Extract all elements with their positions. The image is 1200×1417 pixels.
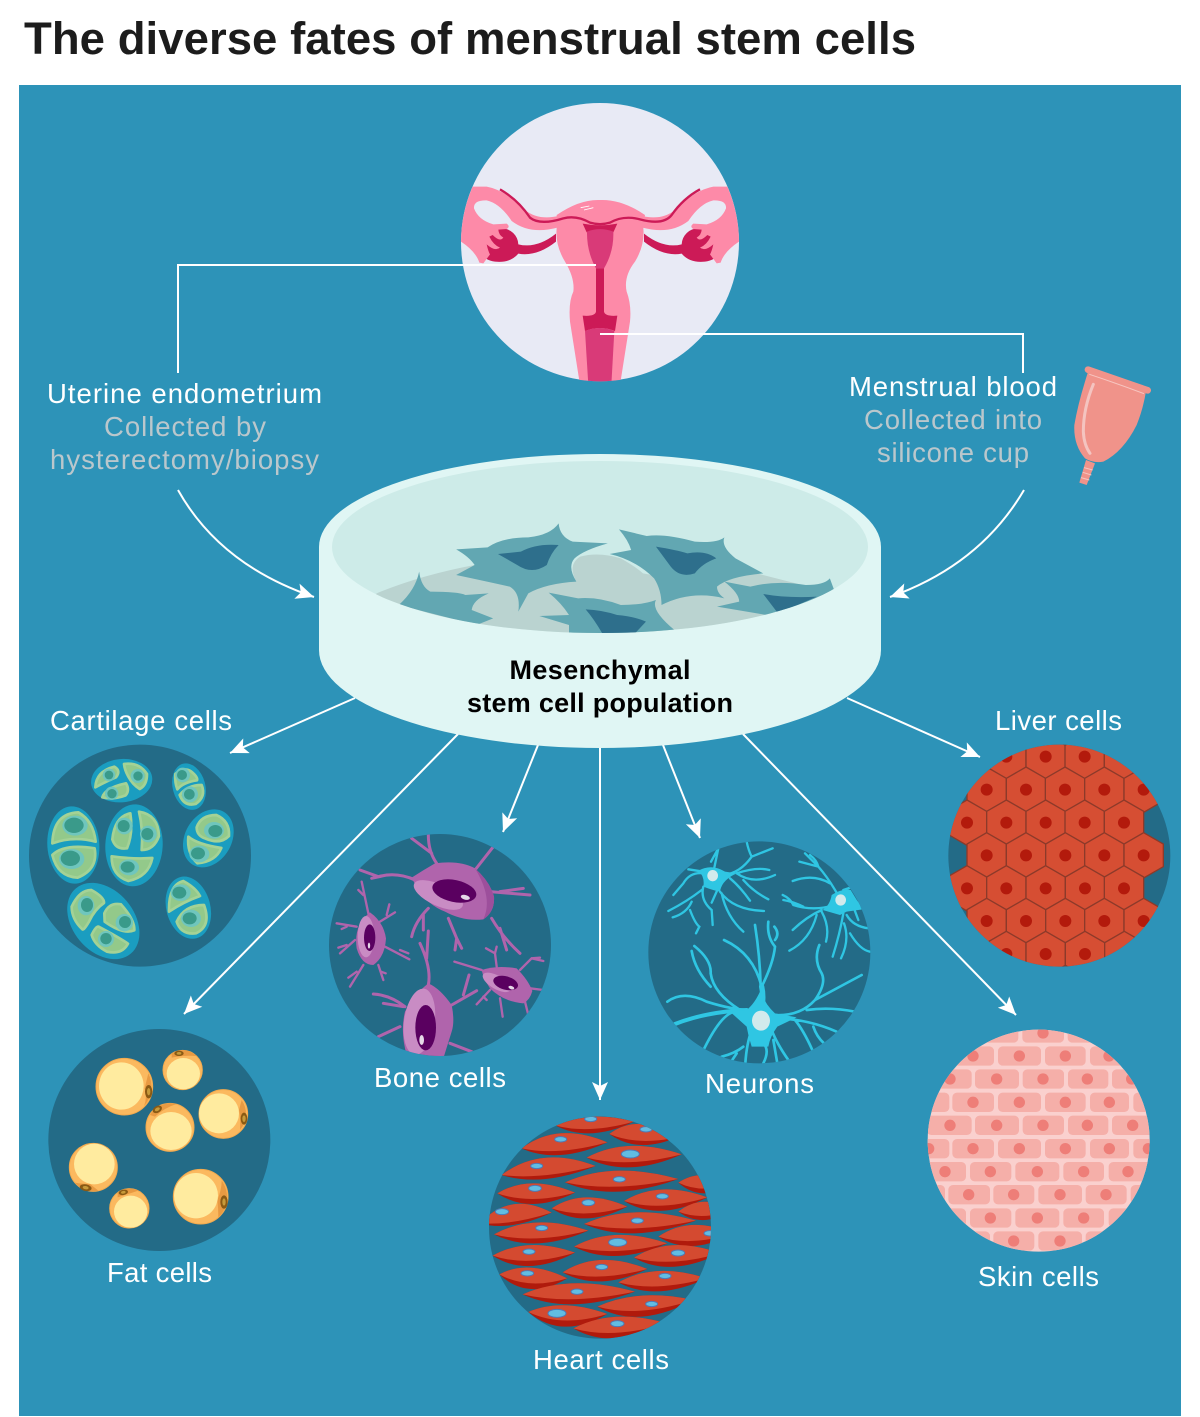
text: menstrual blood <box>849 371 1057 468</box>
illustration: bone cells <box>329 834 551 1058</box>
text: dish label <box>467 655 733 718</box>
text: menstrual blood: Collected into <box>864 404 1042 435</box>
arrow: menstrual blood to dish <box>890 490 1024 597</box>
text: uterine endometrium: Collected by <box>104 411 266 442</box>
icon: menstrual cup <box>1074 370 1148 485</box>
connector: menstrual blood line <box>600 334 1023 373</box>
illustration: petri dish <box>319 454 881 748</box>
arrow: to neurons <box>663 745 700 838</box>
label: skin cells: Skin cells <box>978 1261 1099 1292</box>
text: uterine endometrium <box>47 378 322 475</box>
label: cartilage cells: Cartilage cells <box>50 705 232 736</box>
illustration: neurons <box>648 841 870 1063</box>
text: menstrual blood: silicone cup <box>877 437 1029 468</box>
label: bone cells: Bone cells <box>374 1062 506 1093</box>
arrow: to liver cells <box>847 698 980 757</box>
illustration: liver cells <box>947 734 1170 977</box>
illustration: heart cells <box>489 1116 711 1339</box>
arrow: to skin cells <box>743 734 1016 1015</box>
label: heart cells: Heart cells <box>533 1344 669 1375</box>
arrow: endometrium to dish <box>178 490 314 597</box>
label: fat cells: Fat cells <box>107 1257 212 1288</box>
text: uterine endometrium: hysterectomy/biopsy <box>50 444 319 475</box>
illustration: uterus circle <box>457 103 743 385</box>
text: dish label: Mesenchymal <box>510 655 690 685</box>
arrow: to bone cells <box>503 745 538 832</box>
illustration: skin cells <box>928 1030 1150 1252</box>
arrow: to cartilage cells <box>230 698 355 753</box>
text: uterine endometrium: Uterine endometrium <box>47 378 322 409</box>
illustration: cartilage cells <box>29 745 251 973</box>
text: dish label: stem cell population <box>467 688 733 718</box>
arrow: to fat cells <box>184 734 458 1014</box>
connector: uterine endometrium line <box>178 265 596 373</box>
label: neurons: Neurons <box>705 1068 814 1099</box>
label: liver cells: Liver cells <box>995 705 1122 736</box>
arrow: to heart cells <box>599 746 601 1100</box>
text: menstrual blood: Menstrual blood <box>849 371 1057 402</box>
title: The diverse fates of menstrual stem cells <box>24 13 916 64</box>
illustration: fat cells <box>48 1029 270 1251</box>
